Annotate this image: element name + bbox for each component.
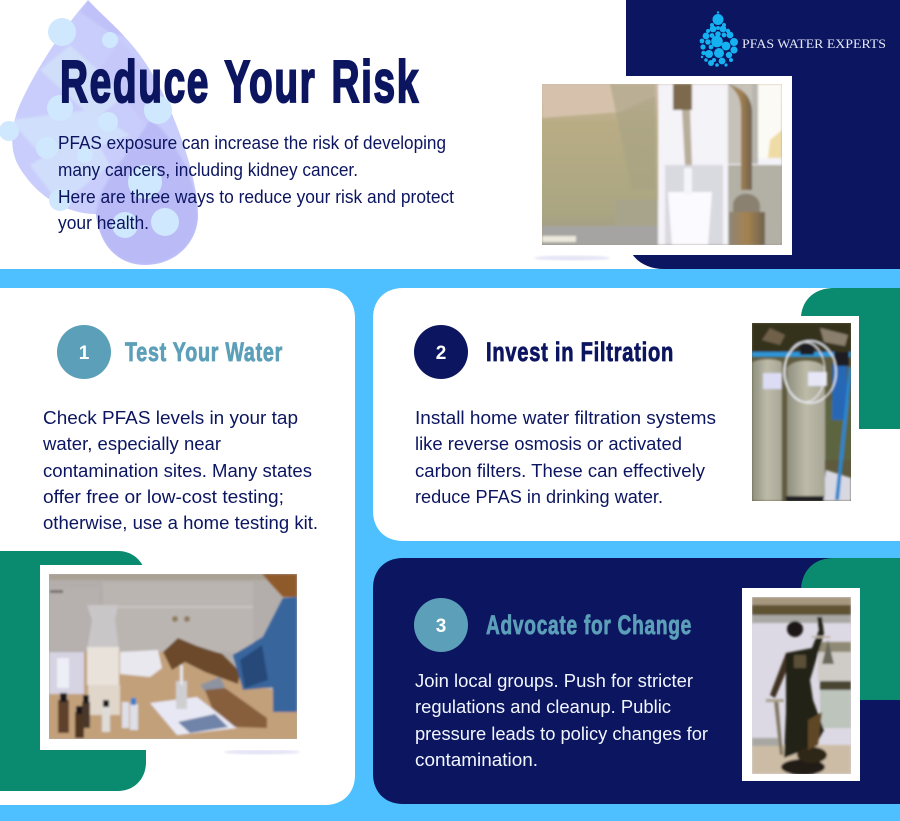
text: step 3: Join local groups. Push for stricter	[415, 670, 693, 691]
photo: lady justice statue	[742, 588, 860, 781]
photo frame shadow	[534, 256, 610, 260]
green accent block	[0, 551, 146, 791]
panel: step 1 test your water	[0, 288, 355, 805]
photo frame shadow	[224, 750, 300, 754]
text: step 1: offer free or low-cost testing;	[43, 486, 284, 507]
text: step 1: Check PFAS levels in your tap	[43, 407, 298, 428]
text: step 2: reduce PFAS in drinking water.	[415, 486, 663, 507]
text: step 1: contamination sites. Many states	[43, 460, 312, 481]
text: step 2	[415, 407, 716, 507]
badge 3	[414, 598, 468, 652]
badge 2	[414, 325, 468, 379]
intro text	[58, 132, 454, 233]
text: step 1: water, especially near	[42, 433, 221, 454]
navy header block	[626, 0, 900, 269]
heading: advocate for change: Advocate for Change	[486, 610, 692, 640]
header band	[0, 0, 900, 269]
text: step 2: carbon filters. These can effectively	[415, 460, 706, 481]
heading: invest in filtration: Invest in Filtration	[486, 337, 674, 367]
heading: test your water: Test Your Water	[125, 337, 283, 367]
intro text: PFAS exposure can increase the risk of developing	[58, 132, 446, 153]
title: Reduce Your Risk	[60, 49, 420, 115]
photo: water testing kit	[40, 565, 307, 750]
watermark: water drop	[12, 0, 198, 265]
badge 3: 3	[436, 616, 446, 637]
badge 1: 1	[79, 343, 90, 364]
photo: faucet and glass	[532, 76, 792, 255]
text: step 2: like reverse osmosis or activated	[415, 433, 682, 454]
text: step 2: Install home water filtration systems	[415, 407, 716, 428]
green accent block	[801, 288, 900, 429]
intro text: many cancers, including kidney cancer.	[58, 159, 358, 180]
text: step 3	[415, 670, 708, 770]
text: step 3: contamination.	[415, 749, 538, 770]
text: step 1	[42, 407, 318, 533]
text: step 1: otherwise, use a home testing kit.	[43, 512, 318, 533]
intro text: your health.	[58, 212, 149, 233]
logo text: PFAS WATER EXPERTS	[742, 36, 886, 51]
panel: step 3 advocate for change	[373, 558, 900, 804]
green accent block	[801, 558, 900, 700]
badge 2: 2	[436, 343, 446, 364]
text: step 3: pressure leads to policy changes for	[415, 723, 708, 744]
panel: step 2 invest in filtration	[373, 288, 900, 541]
badge 1	[57, 325, 111, 379]
text: step 3: regulations and cleanup. Public	[415, 696, 671, 717]
icon: bubble water drop	[700, 11, 738, 67]
photo: filtration tanks	[752, 323, 851, 501]
logo	[700, 11, 886, 67]
intro text: Here are three ways to reduce your risk and protect	[58, 186, 454, 207]
